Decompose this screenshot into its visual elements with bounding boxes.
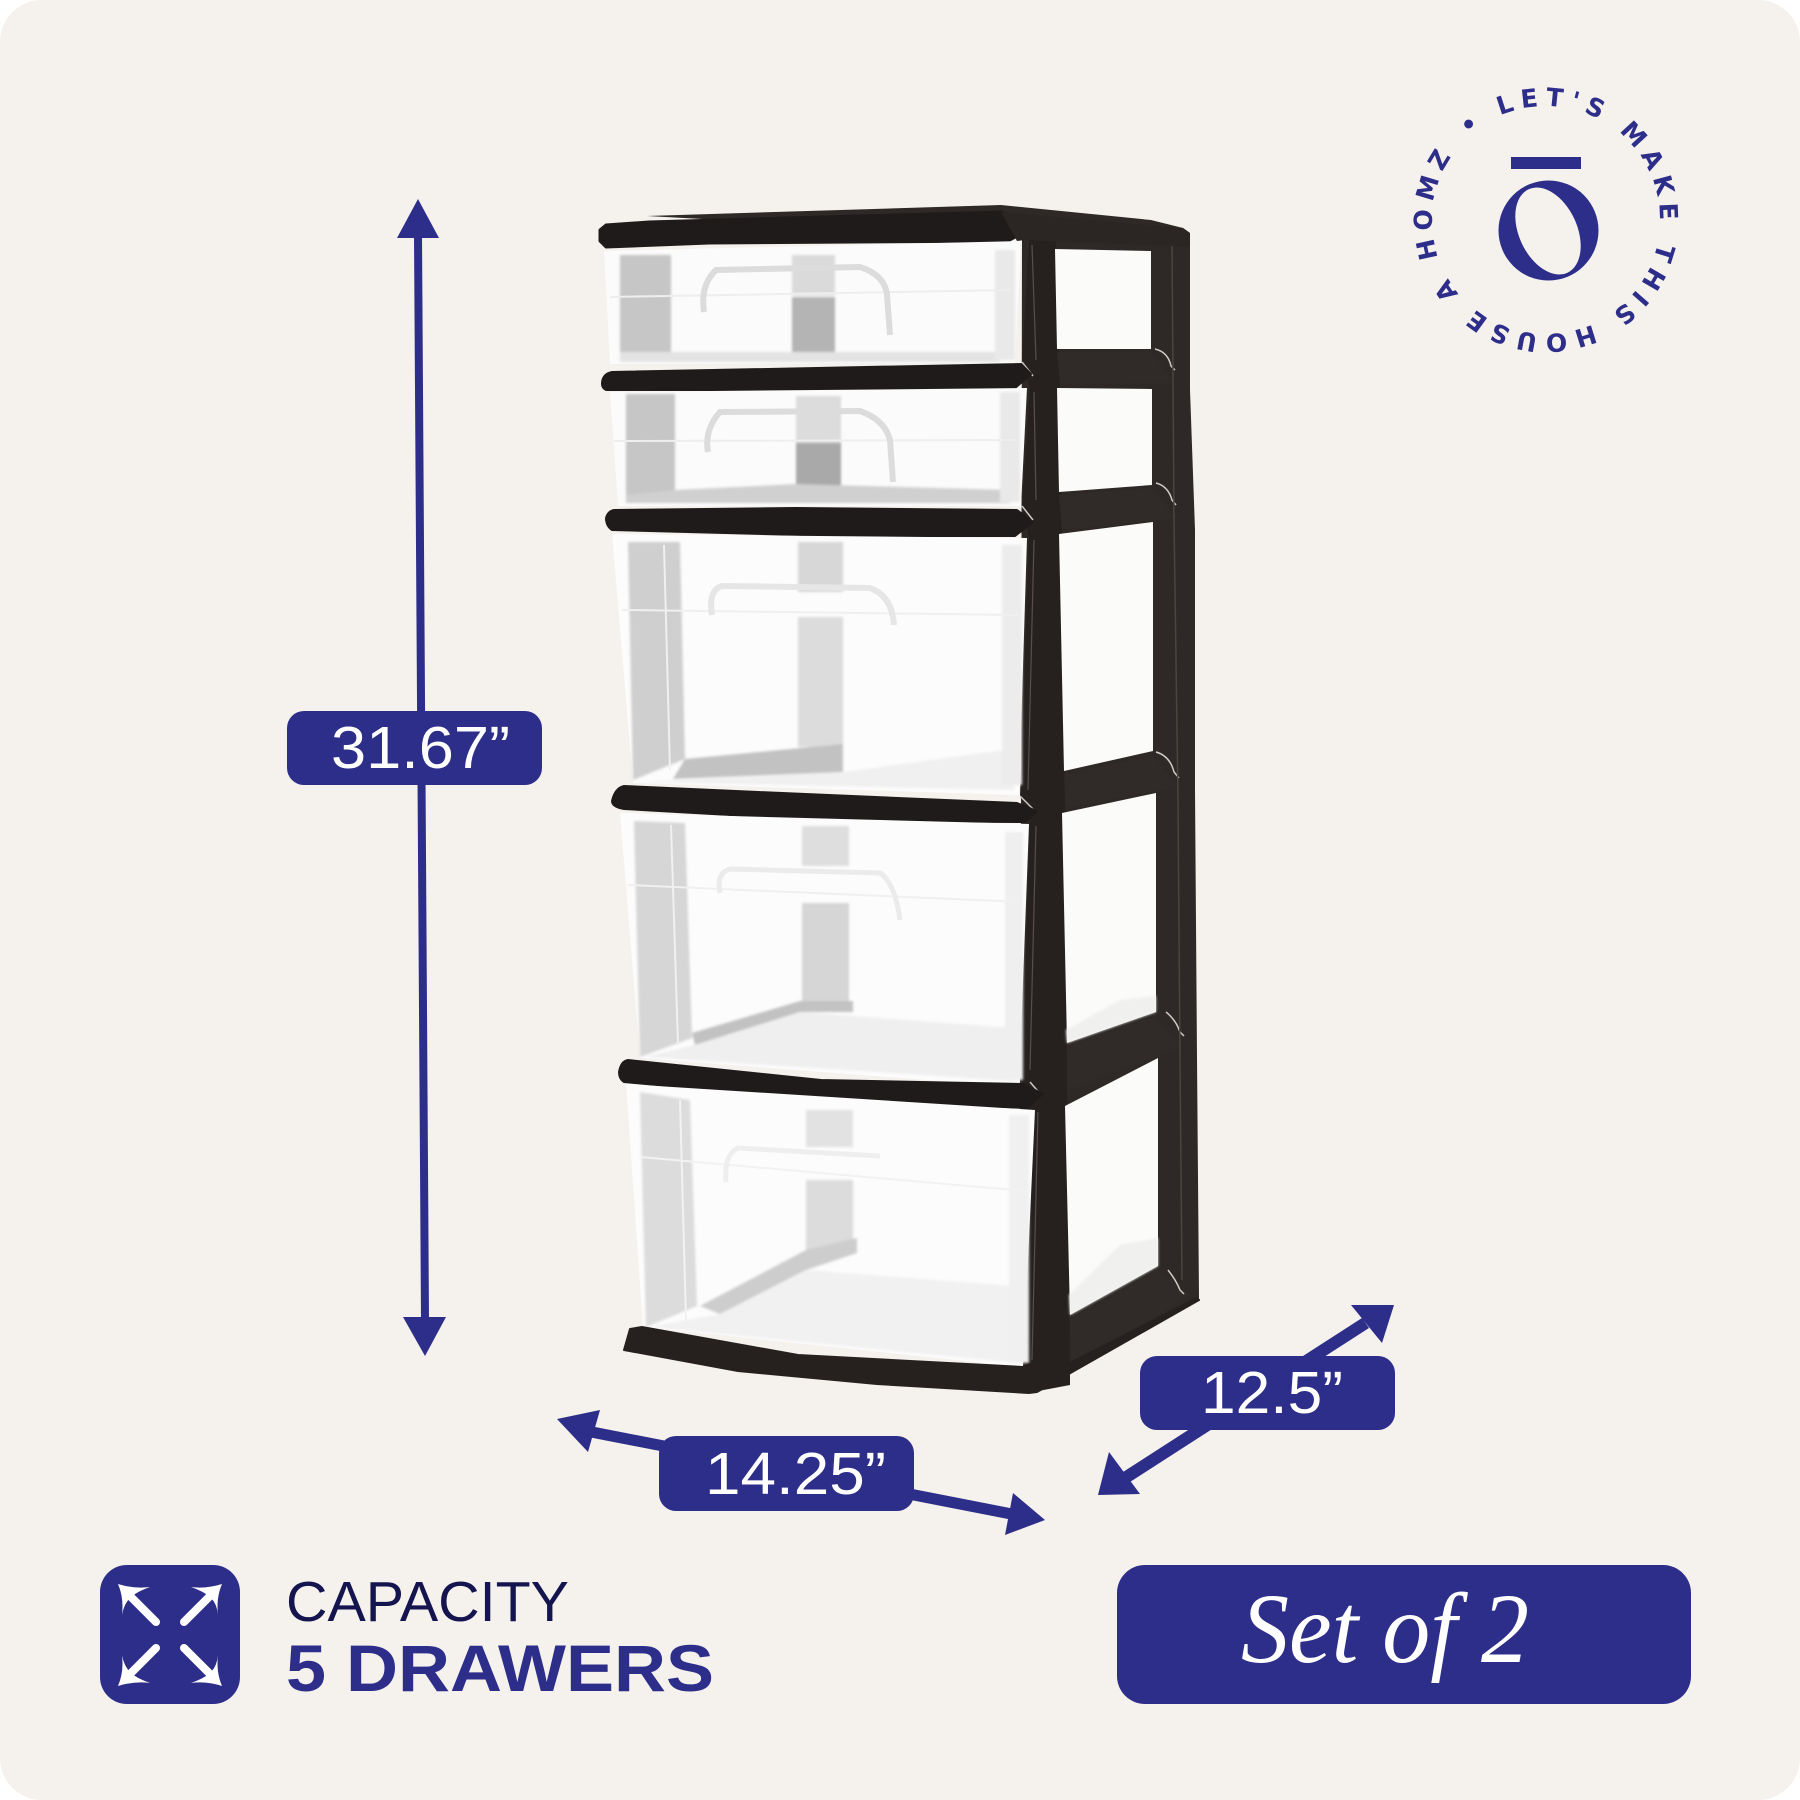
- side cross bars: [1057, 352, 1190, 1368]
- text: capacity: [286, 1570, 714, 1705]
- rear post seam: [1172, 240, 1182, 1280]
- badge: set of 2: [1117, 1565, 1691, 1704]
- label: width: 14.25”: [705, 1441, 886, 1507]
- frame highlights: [1020, 349, 1184, 1372]
- arrow: depth: [1098, 1305, 1394, 1495]
- bar 4: [612, 786, 1037, 822]
- icon: capacity arrows: [100, 1565, 240, 1704]
- label: height: 31.67”: [331, 715, 510, 781]
- text: capacity: CAPACITY: [286, 1570, 569, 1634]
- badge: set of 2: Set of 2: [1241, 1573, 1529, 1684]
- side windows: [1055, 249, 1158, 1315]
- arrow: width: [557, 1410, 1045, 1535]
- logo: circular brand mark: • LET'S MAKE THIS HOUSE A HOMZ: [1413, 87, 1678, 352]
- product: five drawer tower: [600, 205, 1199, 1393]
- frame silhouette: [647, 205, 1199, 1392]
- drawer 4: [620, 813, 1029, 1087]
- bar 5: [619, 1060, 1043, 1108]
- top bar: [600, 212, 1017, 247]
- label: width: [659, 1436, 914, 1511]
- arrow: height: [397, 199, 446, 1356]
- drawer 2: [610, 388, 1027, 506]
- drawer 3: [612, 534, 1027, 795]
- text: capacity: 5 DRAWERS: [286, 1631, 714, 1705]
- drawer 1: [604, 241, 1021, 364]
- side window floor shading: [1066, 996, 1158, 1315]
- top side bar: [1001, 212, 1190, 247]
- front post seam: [1028, 245, 1038, 1360]
- drawer 5: [626, 1084, 1035, 1367]
- bar 2: [602, 364, 1031, 390]
- label: height: [287, 711, 542, 785]
- base bar: [624, 1298, 1199, 1393]
- label: depth: 12.5”: [1201, 1360, 1343, 1426]
- label: depth: [1140, 1356, 1395, 1430]
- bar 3: [606, 508, 1033, 536]
